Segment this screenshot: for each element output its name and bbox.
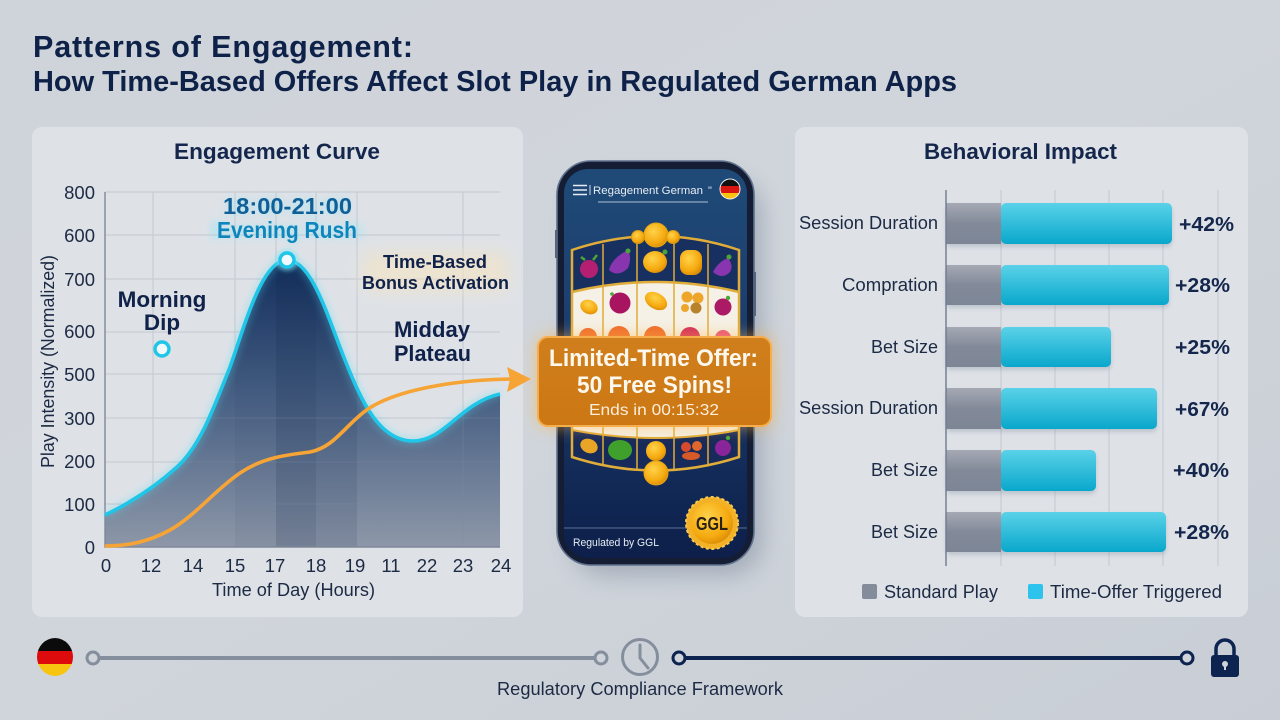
- bar: compration +28%: Compration: [842, 275, 938, 295]
- y axis labels: 800: [64, 182, 95, 203]
- slot symbols row 4: [578, 436, 731, 461]
- y axis labels: [64, 182, 95, 558]
- y axis labels: 100: [64, 494, 95, 515]
- x axis labels: 23: [453, 555, 473, 576]
- bar: bet size +28%: +28%: [1174, 521, 1229, 544]
- regulated by label: Regulated by GGL: [573, 537, 659, 549]
- callout: evening rush: Evening Rush: [210, 217, 364, 243]
- bar: compration +28%: [842, 265, 1230, 308]
- slot symbols row 2: [580, 292, 732, 316]
- bar: session duration +67%: +67%: [1175, 398, 1229, 421]
- callout: midday plateau: [394, 317, 471, 366]
- slot coins: [632, 223, 680, 485]
- y axis labels: 200: [64, 451, 95, 472]
- chart: engagement line: [105, 260, 500, 515]
- title: How Time-Based Offers Affect Slot Play in Regulated German Apps: [33, 66, 957, 98]
- bar: bet size +25%: Bet Size: [871, 337, 938, 357]
- callout: evening rush: 18:00-21:00: [224, 193, 350, 219]
- bar: session duration +67%: [799, 388, 1229, 432]
- timeline segment: grey: [87, 652, 607, 664]
- panel: behavioral impact: [795, 127, 1248, 617]
- x axis labels: 24: [491, 555, 511, 576]
- phone header: Regagement German: [593, 185, 703, 197]
- bar: session duration +67%: Session Duration: [799, 398, 938, 418]
- icon: german flag: [37, 638, 73, 677]
- timeline segment: navy: [673, 652, 1193, 664]
- bar: session duration +42%: +42%: [1179, 213, 1234, 236]
- phone mockup: [37, 127, 1248, 699]
- y axis labels: 300: [64, 408, 95, 429]
- x axis labels: 11: [381, 555, 401, 576]
- x axis labels: 22: [417, 555, 437, 576]
- slot symbols row 1: [580, 248, 732, 278]
- x axis labels: 17: [265, 555, 285, 576]
- chart bands: [276, 317, 357, 546]
- chart: offer line arrow: [105, 367, 531, 546]
- y axis labels: 600: [64, 321, 95, 342]
- bar: bet size +40%: Bet Size: [871, 460, 938, 480]
- x axis labels: 12: [141, 555, 161, 576]
- bar: compration +28%: +28%: [1175, 274, 1230, 297]
- legend: Standard Play: [884, 582, 998, 602]
- bar: bet size +40%: +40%: [1173, 459, 1229, 482]
- callout: midday plateau: Plateau: [394, 341, 471, 366]
- phone header: [573, 179, 740, 202]
- callout: time-based bonus activation: Bonus Activation: [362, 272, 509, 293]
- y axis labels: 500: [64, 364, 95, 385]
- x axis labels: 18: [306, 555, 326, 576]
- bar: session duration +42%: [799, 203, 1234, 247]
- callout: midday plateau: Midday: [394, 317, 470, 342]
- footer caption: Regulatory Compliance Framework: [497, 679, 784, 699]
- callout: evening rush: Evening Rush: [217, 217, 357, 243]
- badge: GGL seal: [686, 497, 738, 549]
- heading: engagement curve: Engagement Curve: [174, 139, 380, 164]
- x axis labels: 15: [225, 555, 245, 576]
- legend: Time-Offer Triggered: [1050, 582, 1222, 602]
- bar: bet size +28%: [871, 512, 1229, 555]
- chart: cyan line glow: [105, 260, 500, 515]
- callout: limited-time offer: Ends in 00:15:32: [589, 402, 719, 419]
- bar: bet size +40%: [871, 450, 1229, 494]
- y axis labels: 600: [64, 225, 95, 246]
- callout: morning dip: Morning: [118, 287, 206, 312]
- y axis labels: 700: [64, 269, 95, 290]
- icon: lock: [1211, 640, 1239, 677]
- callout: morning dip: Dip: [144, 310, 180, 335]
- callout: evening rush: 18:00-21:00: [223, 193, 352, 219]
- x axis labels: 14: [183, 555, 203, 576]
- x axis labels: 0: [101, 555, 111, 576]
- bar: bet size +25%: [871, 327, 1230, 370]
- footer: compliance timeline: [37, 638, 1239, 699]
- bar: session duration +42%: Session Duration: [799, 213, 938, 233]
- title: Patterns of Engagement:: [33, 30, 413, 64]
- legend: [862, 582, 1222, 602]
- callout: limited-time offer: Limited-Time Offer:: [549, 345, 758, 372]
- title: [33, 30, 957, 98]
- slot machine reels: [564, 223, 747, 549]
- y axis labels: 0: [85, 537, 95, 558]
- x axis labels: [101, 555, 511, 576]
- chart: play intensity area: [105, 260, 500, 547]
- callout: limited-time offer: [537, 336, 772, 427]
- callout: time-based bonus activation: Time-Based: [383, 251, 487, 272]
- bar: bet size +28%: Bet Size: [871, 522, 938, 542]
- icon: clock: [622, 640, 658, 674]
- x axis labels: 19: [345, 555, 365, 576]
- x axis title: Time of Day (Hours): [212, 580, 375, 600]
- callout: time-based bonus activation: [362, 251, 509, 293]
- panel: engagement curve: [32, 127, 531, 617]
- y axis title: Play Intensity (Normalized): [38, 255, 58, 468]
- phone header: ": [708, 185, 712, 197]
- slot symbols row 3: [579, 326, 731, 336]
- badge: GGL seal: GGL: [696, 514, 728, 534]
- heading: behavioral impact: Behavioral Impact: [924, 139, 1118, 164]
- callout: limited-time offer: 50 Free Spins!: [577, 372, 732, 399]
- callout: evening rush: [210, 193, 364, 271]
- bar: bet size +25%: +25%: [1175, 336, 1230, 359]
- callout: morning dip: [118, 287, 206, 356]
